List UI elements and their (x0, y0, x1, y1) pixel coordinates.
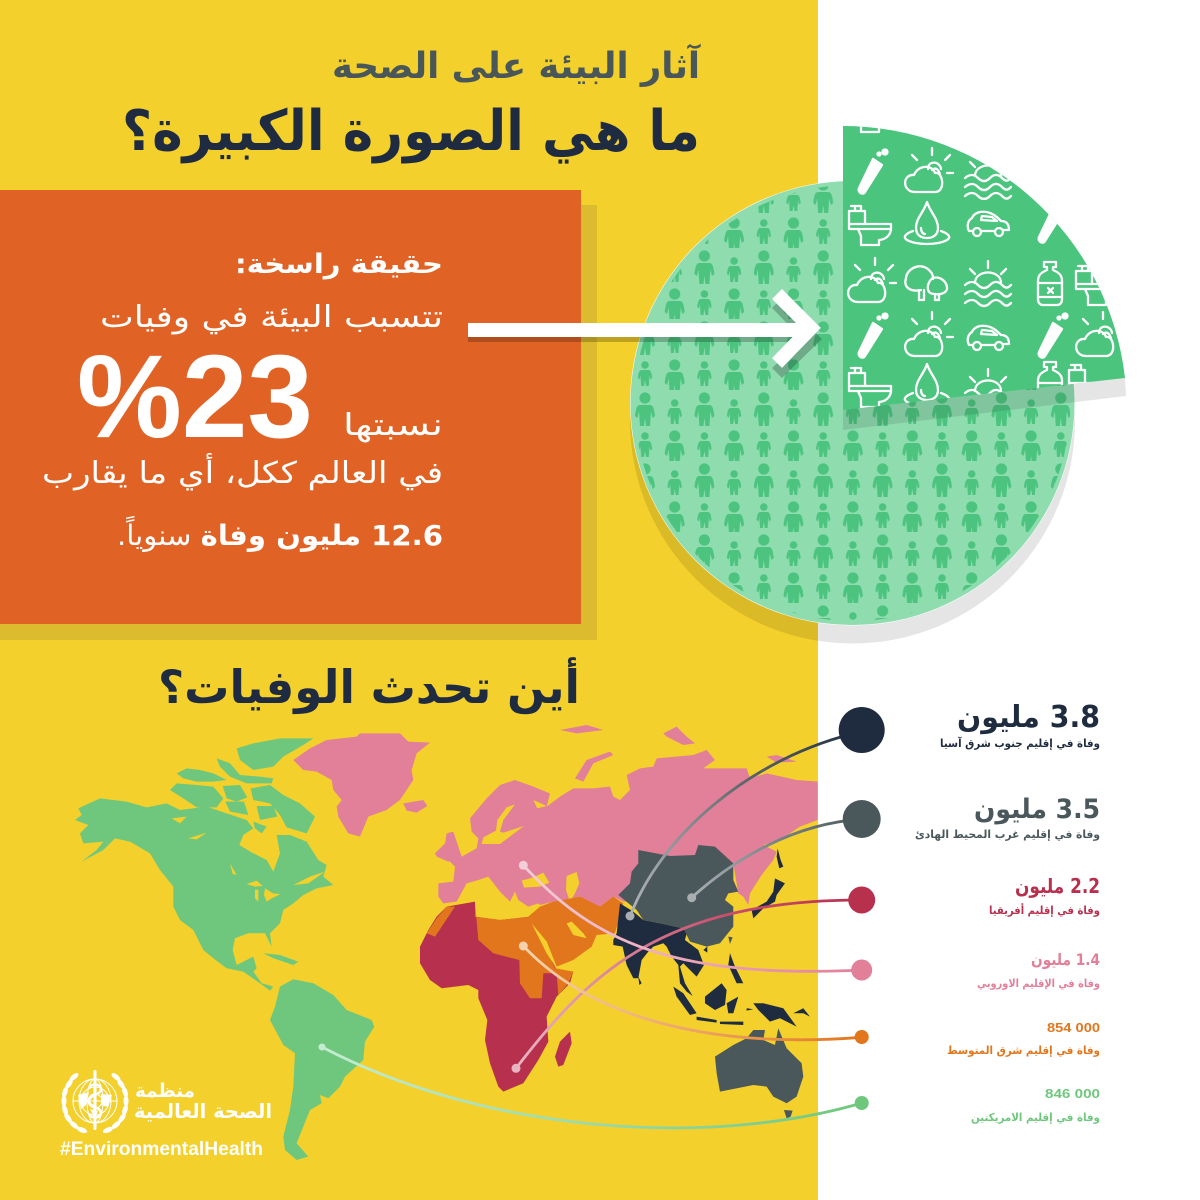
orange box shadow (0, 205, 597, 640)
legend dot: South-East Asia (839, 707, 885, 753)
legend entry: Europe: وفاة في الإقليم الاوروبي (977, 977, 1100, 990)
legend entry: Eastern Mediterranean: وفاة في إقليم شرق المتوسط (947, 1044, 1100, 1057)
hashtag: #EnvironmentalHealth (60, 1139, 263, 1160)
icon: WHO emblem (61, 1070, 129, 1134)
pie drop shadow (630, 198, 1075, 644)
WHO name in Arabic: منظمة (135, 1080, 195, 1102)
legend entry: Americas: وفاة في إقليم الامريكتين (971, 1111, 1100, 1124)
connector: Europe (519, 861, 862, 971)
legend entry: Africa: 2.2 مليون (1015, 874, 1100, 898)
legend entry: Europe: 1.4 مليون (1031, 950, 1100, 969)
pie base: all deaths, people pattern (630, 180, 1075, 626)
wedge shadow (843, 378, 1126, 430)
connector: Eastern Mediterranean (519, 942, 862, 1040)
legend dot: Americas (855, 1096, 869, 1110)
inland seas on the Eurasia map (482, 800, 579, 902)
WHO name in Arabic (134, 1080, 272, 1123)
key fact percent label: نسبتها (343, 408, 443, 443)
region: Americas (75, 738, 374, 1160)
region: Eastern Mediterranean (427, 897, 623, 998)
legend entry: South-East Asia: 3.8 مليون (957, 700, 1100, 735)
key fact line three: في العالم ككل، أي ما يقارب (42, 452, 443, 491)
region: Africa (420, 902, 573, 1092)
world map by WHO region (75, 725, 818, 1160)
connector: Western Pacific (687, 819, 862, 902)
WHO name in Arabic: الصحة العالمية (134, 1099, 272, 1123)
key fact line four: 12.6 مليون وفاة سنوياً. (117, 515, 443, 552)
legend dot: Europe (851, 960, 872, 980)
legend entry: Americas: 846 000 (1045, 1087, 1100, 1101)
pie chart: environment share of deaths (630, 93, 1126, 644)
key fact label: حقيقة راسخة: (235, 249, 443, 280)
heading: main title: ما هي الصورة الكبيرة؟ (122, 99, 700, 164)
WHO logo (61, 1070, 272, 1134)
legend entry: Western Pacific (915, 794, 1100, 841)
legend entry: Africa (989, 874, 1100, 917)
legend entry: Western Pacific: 3.5 مليون (974, 794, 1100, 825)
legend entry: Africa: وفاة في إقليم أفريقيا (989, 903, 1100, 917)
region: South-East Asia (613, 903, 704, 1015)
connector: Africa (512, 900, 862, 1073)
legend entry: Eastern Mediterranean: 854 000 (1047, 1021, 1100, 1035)
arrow from fact box to pie wedge (468, 294, 812, 373)
legend dot: Western Pacific (843, 800, 881, 838)
legend entry: South-East Asia (940, 700, 1100, 750)
connector lines from regions to legend dots (318, 732, 862, 1128)
pie wedge: 23 percent, environmental hazard icons (843, 126, 1125, 410)
connector: Americas (318, 1044, 862, 1128)
yellow background panel (0, 0, 818, 1200)
heading: where deaths occur: أين تحدث الوفيات؟ (158, 657, 580, 714)
legend entry: Europe (977, 950, 1100, 990)
heading: subtitle: آثار البيئة على الصحة (332, 43, 702, 87)
legend entry: South-East Asia: وفاة في إقليم جنوب شرق آسيا (940, 736, 1100, 750)
key figure: 23 percent: %23 (77, 331, 313, 463)
panel: key fact box (0, 190, 581, 624)
key fact line one: تتسبب البيئة في وفيات (100, 300, 443, 335)
legend entry: Eastern Mediterranean (947, 1021, 1100, 1057)
region: Europe and Greenland (293, 725, 818, 907)
legend dot: Africa (848, 886, 875, 914)
connector: South-East Asia (626, 732, 862, 920)
legend entry: Western Pacific: وفاة في إقليم غرب المحيط الهادئ (915, 828, 1100, 841)
region: Western Pacific (618, 845, 810, 1118)
legend entry: Americas (971, 1087, 1100, 1124)
legend dot: Eastern Mediterranean (855, 1030, 869, 1044)
